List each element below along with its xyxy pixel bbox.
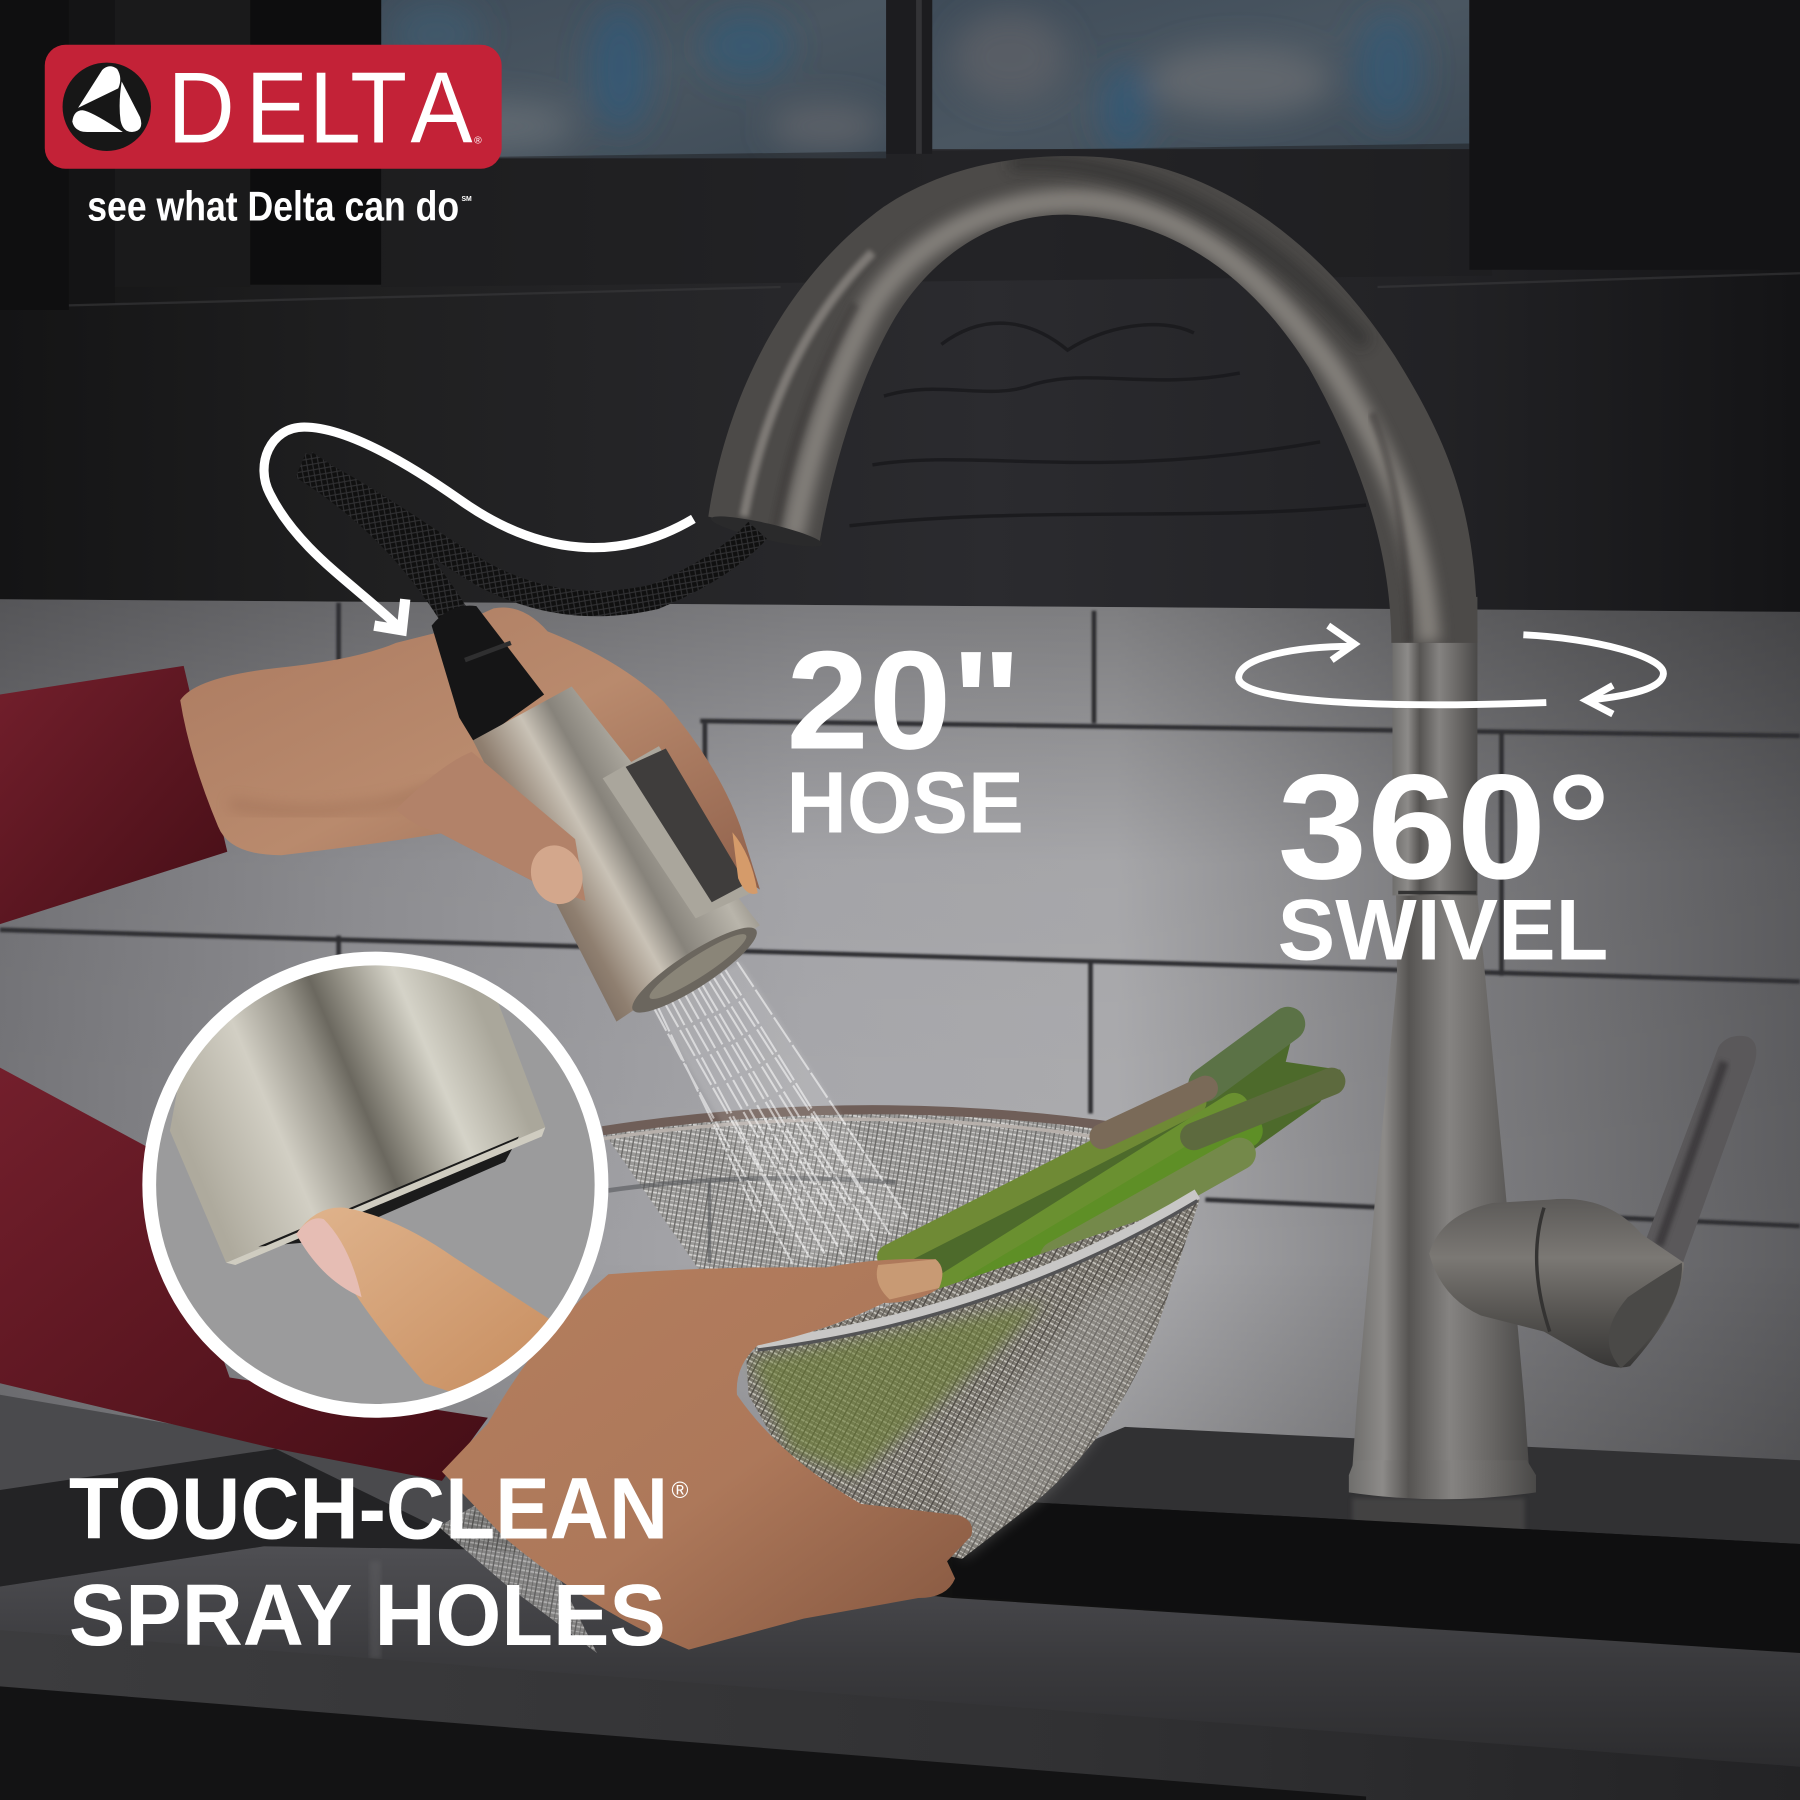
front counter edge xyxy=(0,1686,1366,1800)
finger tip xyxy=(732,832,758,894)
upper hand holding sprayer xyxy=(180,606,766,1024)
arrow: swivel rotation xyxy=(1239,626,1663,714)
counter top surface right xyxy=(953,1427,1800,1544)
faucet arch spout xyxy=(708,156,1477,643)
tagline: SM xyxy=(461,196,472,203)
window pane left xyxy=(381,0,886,158)
faucet base cone xyxy=(1352,884,1529,1469)
colander back xyxy=(603,1107,1200,1355)
panel: dark wood wall and window background xyxy=(0,0,1800,620)
callout: 20 inch hose: HOSE xyxy=(786,754,1024,851)
counter front edge right xyxy=(953,1498,1800,1653)
panel: subway tile backsplash xyxy=(0,599,1800,1481)
callout: 360 degree swivel: 360° xyxy=(1278,743,1611,910)
upper sleeve xyxy=(0,666,227,924)
lower sleeve xyxy=(0,1068,488,1481)
sink basin xyxy=(0,1546,1800,1800)
callout: 20 inch hose xyxy=(786,621,1024,851)
metal spray cap xyxy=(170,965,545,1262)
water spray xyxy=(652,962,907,1263)
sprayer toggle button xyxy=(603,746,751,918)
wordmark: DELTA xyxy=(168,51,473,164)
front counter top surface xyxy=(0,1630,1800,1800)
white circle ring xyxy=(149,959,602,1411)
tagline: see what Delta can do xyxy=(87,183,459,229)
arrow: hose pull-out path xyxy=(264,427,693,630)
Delta logo badge xyxy=(45,45,502,169)
inset: touch-clean spray holes close-up xyxy=(149,930,602,1411)
callout: 360 degree swivel: SWIVEL xyxy=(1278,883,1608,979)
callout: touch-clean spray holes: ® xyxy=(672,1477,689,1503)
colander front bowl xyxy=(439,1194,1200,1653)
callout: 20 inch hose: 20" xyxy=(786,621,1022,778)
counter surface left xyxy=(0,1395,505,1527)
pull-down sprayer head xyxy=(473,686,766,1024)
faucet vertical pole xyxy=(1392,597,1477,895)
faucet xyxy=(708,156,1756,1499)
faucet base flange xyxy=(1349,1460,1536,1499)
braided hose xyxy=(301,465,758,614)
thumb xyxy=(396,752,591,911)
panel: countertop and sink xyxy=(0,1395,1800,1800)
finger pressing spray holes xyxy=(296,1207,551,1406)
hose connector xyxy=(432,606,544,744)
colander mesh below left xyxy=(439,1481,597,1653)
Delta logo badge: ® xyxy=(474,135,482,146)
faucet handle xyxy=(1429,1036,1756,1368)
thumb nail xyxy=(877,1259,942,1299)
logo circle mark xyxy=(63,63,151,151)
callout: touch-clean spray holes: SPRAY HOLES xyxy=(69,1567,666,1664)
callout: touch-clean spray holes xyxy=(69,1460,689,1664)
faucet reflection on counter xyxy=(1352,1498,1524,1555)
asparagus xyxy=(884,1016,1341,1303)
lower hand holding colander xyxy=(442,1259,972,1650)
callout: touch-clean spray holes: TOUCH-CLEAN xyxy=(69,1460,668,1557)
callout: 360 degree swivel xyxy=(1278,743,1611,979)
granite edge left xyxy=(0,1449,482,1586)
colander rim xyxy=(758,1194,1197,1345)
window pane right xyxy=(932,0,1469,155)
